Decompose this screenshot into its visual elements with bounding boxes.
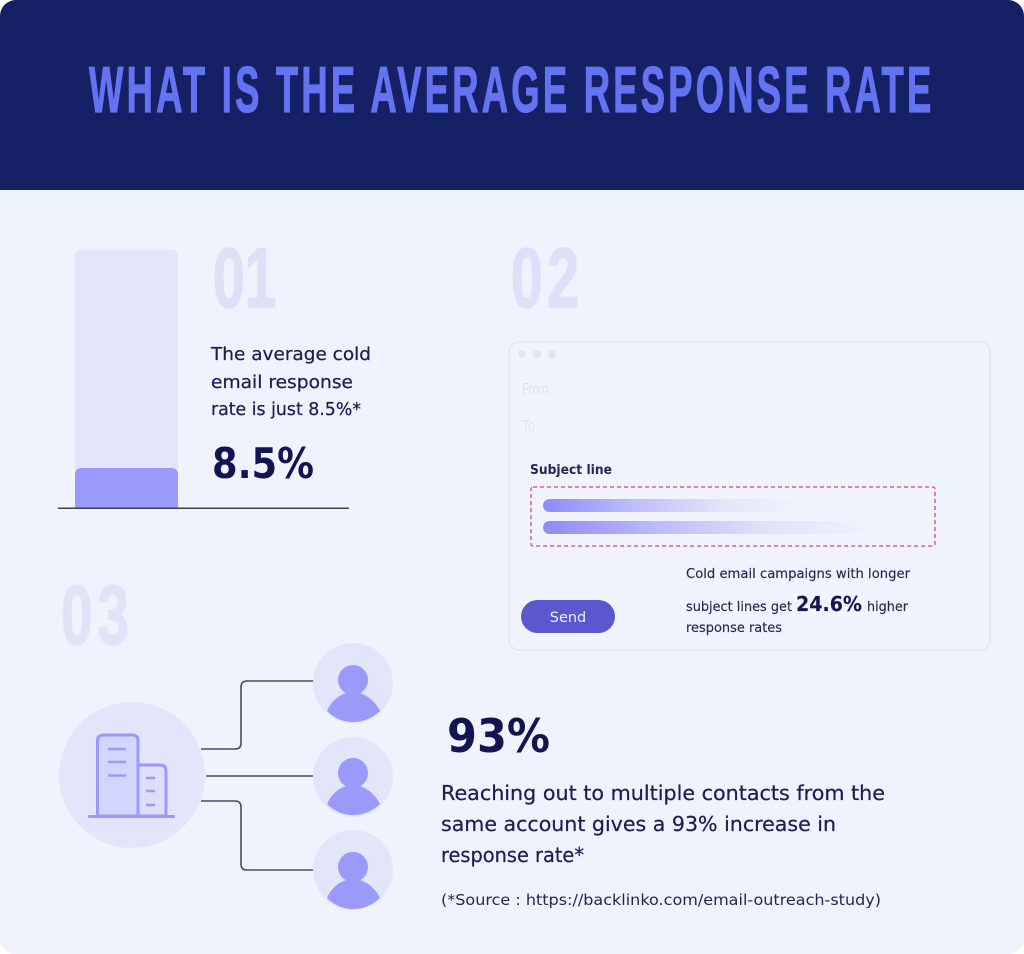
- panel: 01 average response rate: [58, 232, 371, 509]
- description text: The average cold: [210, 344, 371, 365]
- icon: building: [59, 702, 205, 848]
- email window: To: [522, 418, 535, 435]
- description text: subject lines get: [686, 600, 792, 615]
- description text: higher: [867, 600, 909, 615]
- number 03: 03: [61, 569, 129, 663]
- description text: Cold email campaigns with longer: [686, 567, 911, 582]
- email window: From: [522, 381, 548, 398]
- statistic 8.5%: 8.5%: [212, 439, 314, 488]
- icon: contact 1: [313, 643, 393, 723]
- description text: same account gives a 93% increase in: [441, 812, 836, 836]
- subject line box: [531, 487, 935, 546]
- description text: [210, 344, 371, 420]
- icon: contact 2: [313, 737, 393, 817]
- connector lines: [201, 681, 316, 870]
- description text: [686, 567, 911, 636]
- email window: [509, 342, 990, 650]
- send button: Send: [550, 610, 586, 626]
- panel: 02 subject lines: [509, 232, 990, 650]
- send button: [521, 600, 615, 633]
- panel: 03 multiple contacts: [59, 569, 885, 910]
- number 02: 02: [511, 232, 579, 326]
- title banner: [0, 0, 1024, 190]
- description text: email response: [211, 372, 353, 393]
- title: WHAT IS THE AVERAGE RESPONSE RATE: [89, 54, 931, 127]
- description text: rate is just 8.5%*: [211, 399, 361, 420]
- number 01: 01: [213, 232, 276, 326]
- description text: response rate*: [441, 843, 584, 867]
- source note: (*Source : https://backlinko.com/email-outreach-study): [441, 891, 881, 909]
- bar chart: 8.5%: [58, 250, 349, 509]
- description text: response rates: [686, 621, 782, 636]
- subject line label: Subject line: [530, 463, 612, 478]
- description text: 24.6%: [796, 592, 862, 616]
- description text: Reaching out to multiple contacts from the: [441, 781, 885, 805]
- statistic 93%: 93%: [447, 709, 550, 763]
- icon: contact 3: [313, 830, 393, 910]
- description text: [441, 781, 885, 867]
